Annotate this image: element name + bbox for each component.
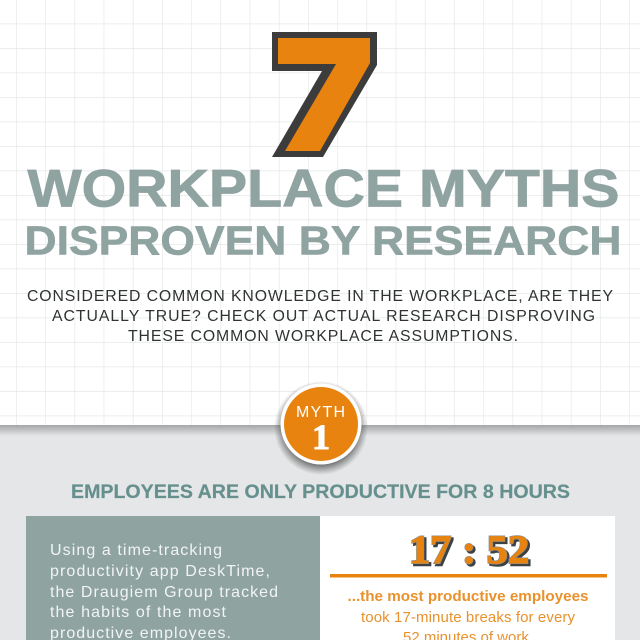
title line 2: DISPROVEN BY RESEARCH xyxy=(24,218,622,264)
stat: 17 : 52: 17 : 52 xyxy=(409,527,529,572)
intro text block: THESE COMMON WORKPLACE ASSUMPTIONS. xyxy=(128,328,518,345)
badge: myth 1: 1 xyxy=(312,417,330,457)
badge: myth 1 xyxy=(274,381,368,475)
icon: big number seven xyxy=(272,32,377,157)
section heading: EMPLOYEES ARE ONLY PRODUCTIVE FOR 8 HOURS xyxy=(71,482,570,503)
stat: 17 : 52: 17 : 52 xyxy=(411,529,531,574)
badge: myth 1: MYTH xyxy=(296,404,345,421)
stat caption: ...the most productive employees xyxy=(348,588,588,605)
panel: left description: the habits of the most xyxy=(50,604,227,621)
stat: 17 : 52: 17 : 52 xyxy=(409,527,529,572)
panel: right statistic xyxy=(320,516,615,640)
intro text block xyxy=(27,288,613,345)
stat caption: took 17-minute breaks for every xyxy=(361,609,576,626)
intro text block: CONSIDERED COMMON KNOWLEDGE IN THE WORKPLACE, ARE THEY xyxy=(27,288,613,305)
panel: left description: the Draugiem Group tracked xyxy=(50,584,278,601)
panel: myth 1 section background xyxy=(0,425,640,640)
panel: left description: Using a time-tracking xyxy=(50,542,222,559)
title line 1: WORKPLACE MYTHS xyxy=(28,160,620,218)
stat caption xyxy=(348,588,588,640)
panel: left description: productivity app DeskTime, xyxy=(50,563,270,580)
panel: left description xyxy=(26,516,320,640)
intro text block: ACTUALLY TRUE? CHECK OUT ACTUAL RESEARCH DISPROVING xyxy=(52,308,595,325)
